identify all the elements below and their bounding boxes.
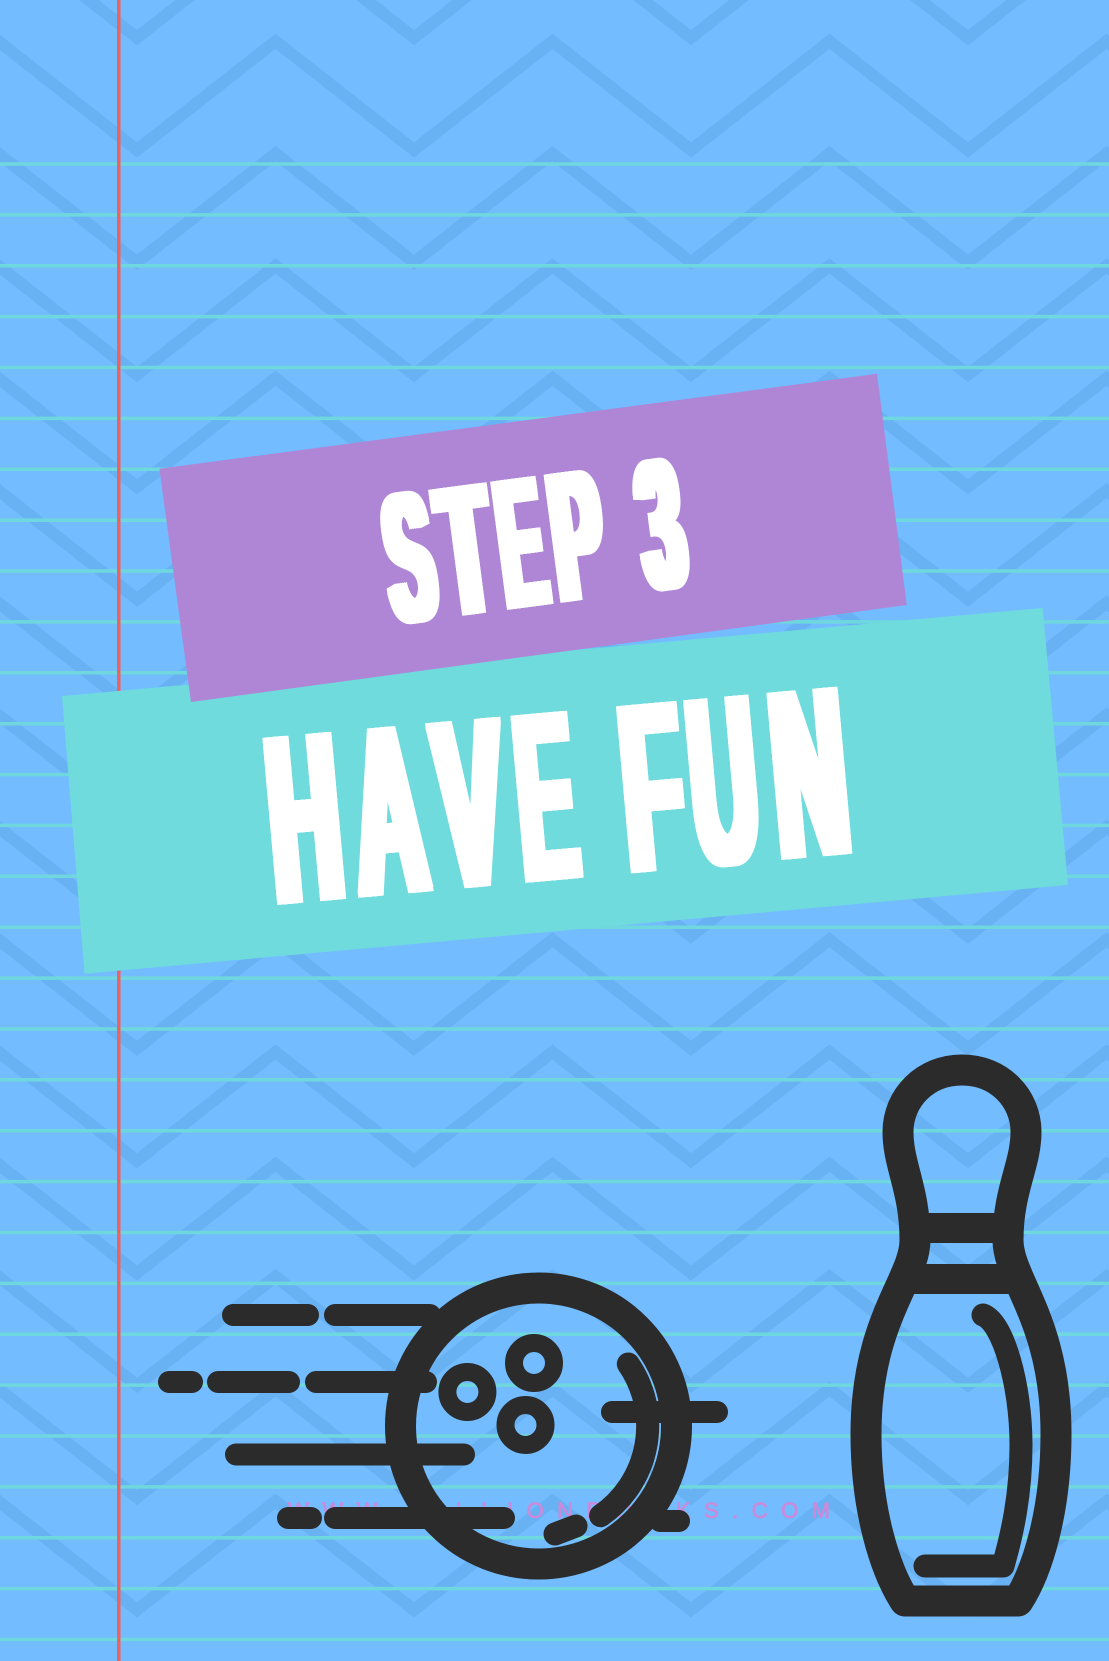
heading: STEP 3: S [373,453,445,662]
heading: STEP 3 [373,421,695,662]
heading: HAVE FUN: V [426,668,514,938]
heading: HAVE FUN: E [505,662,585,931]
heading: STEP 3: 3 [627,421,695,628]
purple banner [159,374,907,702]
heading: STEP 3: E [486,439,555,647]
icon: bowling pin [866,1070,1056,1601]
heading: HAVE FUN: A [342,675,434,945]
heading: HAVE FUN [257,638,856,953]
icon: bowling ball with speed lines [169,1288,717,1564]
heading: HAVE FUN: H [257,683,350,953]
red margin line [117,0,120,1661]
heading: STEP 3: P [539,431,614,640]
website watermark: WWW.ZILLIONBOOKS.COM [288,1498,830,1523]
heading: HAVE FUN: N [761,638,856,908]
heading: HAVE FUN: F [611,652,692,921]
heading: STEP 3: T [428,446,503,654]
heading: HAVE FUN: U [679,646,767,915]
teal banner [62,608,1068,974]
